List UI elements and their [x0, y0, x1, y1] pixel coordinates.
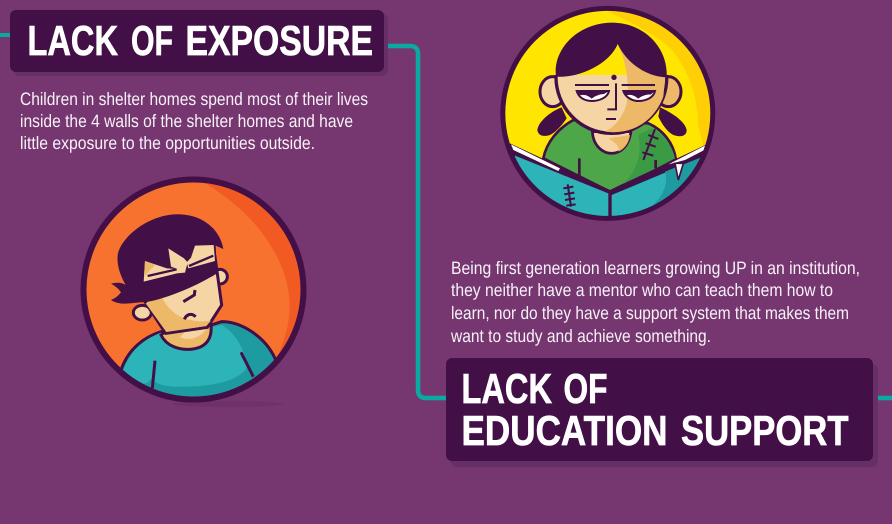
- icon: boy with hair over eyes: [80, 176, 306, 402]
- heading: lack of education support: LACK: [462, 365, 552, 412]
- book: [510, 143, 706, 216]
- hair: [556, 23, 667, 77]
- text block: education description: want to study and achieve something.: [450, 326, 711, 346]
- right ear: [213, 269, 227, 284]
- heading: lack of education support: [446, 358, 878, 467]
- connector line left stub: [0, 33, 12, 37]
- body: [543, 120, 676, 192]
- left ear: [133, 305, 151, 320]
- text block: education description: [450, 258, 860, 346]
- face: [142, 257, 222, 333]
- text block: exposure description: [20, 89, 368, 153]
- icon: girl reading a book: [500, 6, 716, 221]
- ears: [540, 77, 565, 107]
- neck: [161, 325, 211, 349]
- text block: exposure description: little exposure to the opportunities outside.: [20, 133, 315, 153]
- connector line between headings: [382, 46, 448, 398]
- text block: education description: they neither have a mentor who can teach them how to: [451, 280, 833, 300]
- connector line right stub: [871, 396, 892, 400]
- heading: lack of exposure: LACK: [28, 17, 118, 64]
- shirt: [120, 320, 276, 396]
- text block: exposure description: inside the 4 walls of the shelter homes and have: [20, 111, 353, 131]
- heading: lack of education support: SUPPORT: [681, 407, 849, 454]
- pigtails: [537, 107, 567, 136]
- heading: lack of exposure: OF: [131, 17, 173, 64]
- nose and mouth: [606, 83, 616, 119]
- text block: exposure description: Children in shelter homes spend most of their lives: [20, 89, 368, 109]
- nose and mouth: [183, 290, 196, 319]
- peach gaps in fringe: [144, 261, 177, 282]
- heading: lack of exposure: [10, 10, 388, 76]
- face: [556, 75, 667, 133]
- hair: [111, 214, 223, 304]
- stitches on sleeve: [642, 129, 658, 160]
- heading: lack of education support: OF: [564, 365, 608, 412]
- neck: [592, 132, 631, 153]
- stitches on book: [563, 184, 576, 207]
- heading: lack of exposure: EXPOSURE: [186, 17, 373, 64]
- bindi: [611, 75, 617, 80]
- eyes and brows: [575, 84, 655, 86]
- heading: lack of education support: EDUCATION: [462, 407, 668, 454]
